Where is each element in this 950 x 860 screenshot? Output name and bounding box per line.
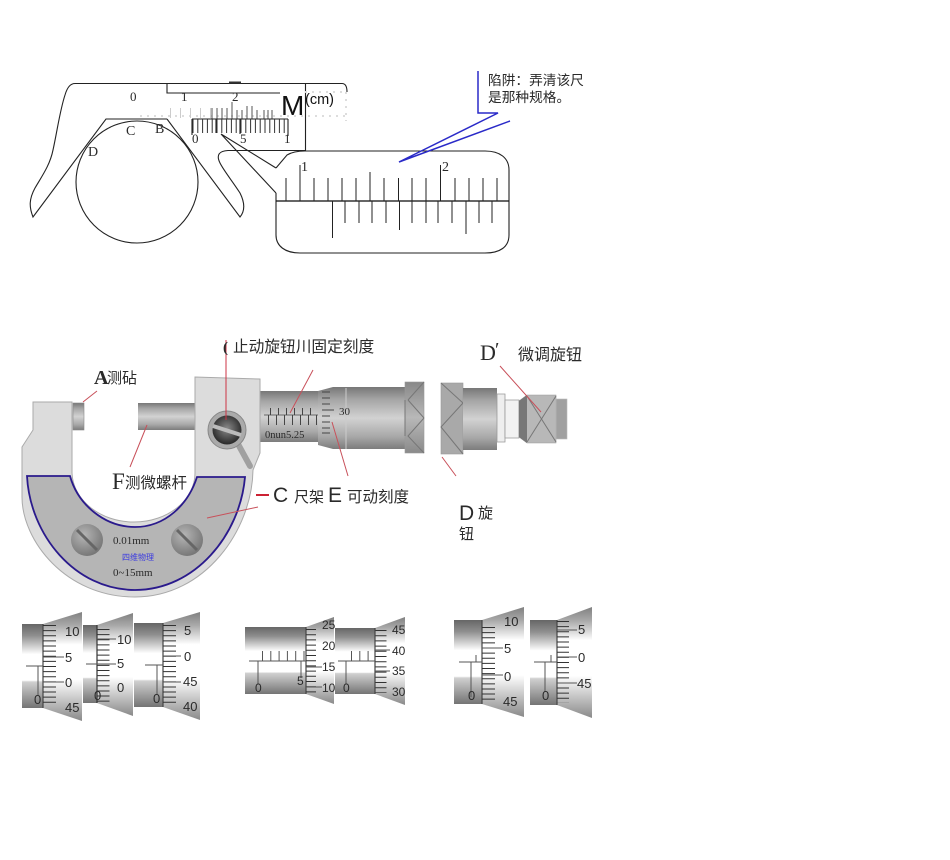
micrometer part labels	[94, 338, 582, 543]
reading 2: 0	[117, 680, 124, 695]
anvil	[73, 403, 84, 430]
label: fine adjustment D′	[480, 339, 582, 365]
reading 3: 0	[153, 691, 160, 706]
ratchet knob right half	[441, 383, 519, 454]
label: knob D: 钮	[459, 526, 474, 543]
reading 5: 35	[392, 664, 406, 678]
frame	[22, 377, 260, 597]
reading 6: 10	[504, 614, 518, 629]
sleeve scale: 0nun5.25	[265, 430, 304, 441]
reading example 1 group	[22, 612, 200, 721]
reading 5: 30	[392, 685, 406, 699]
reading 3	[134, 612, 200, 720]
reading 6	[454, 607, 524, 717]
reading 4: 0	[255, 681, 262, 695]
screw left	[71, 524, 103, 556]
measured circle	[76, 121, 198, 243]
reading 2: 5	[117, 656, 124, 671]
caliper digits and contact labels: C	[126, 124, 135, 139]
label: spindle F	[112, 469, 187, 494]
reading 1: 10	[65, 624, 79, 639]
label: anvil A: A	[94, 367, 109, 389]
reading 1: 0	[34, 692, 41, 707]
reading 7	[530, 607, 592, 718]
label: frame C and movable scale E: 可动刻度	[347, 488, 409, 506]
spindle	[138, 403, 196, 430]
reading 5: 45	[392, 623, 406, 637]
magnified scale panel	[276, 151, 509, 253]
label: fine adjustment D′: D	[480, 340, 496, 365]
label: frame C and movable scale E: 尺架	[294, 489, 324, 506]
label: anvil A	[94, 367, 137, 389]
label: frame C and movable scale E: C	[273, 484, 288, 507]
reading 1: 45	[65, 700, 79, 715]
label: knob D	[459, 502, 493, 543]
reading 5	[335, 617, 406, 705]
reading 7: 5	[578, 622, 585, 637]
callout text: 陷阱：弄清该尺	[488, 73, 584, 88]
reading 3: 40	[183, 699, 197, 714]
reading example 3 group	[454, 607, 592, 718]
red leader lines	[83, 340, 541, 518]
reading 1: 0	[65, 675, 72, 690]
lock handle	[238, 444, 250, 466]
thimble scale	[322, 388, 350, 449]
label: knob D: D	[459, 502, 474, 525]
fine adjustment knob	[519, 395, 567, 443]
reading 2: 0	[94, 688, 101, 703]
caliper digits and contact labels: D	[88, 145, 98, 160]
reading 6: 45	[503, 694, 517, 709]
reading 3: 0	[184, 649, 191, 664]
reading example 2 group	[245, 617, 406, 705]
ratchet knob left half	[405, 382, 424, 453]
caliper digits and contact labels: 1	[181, 89, 188, 104]
reading 4	[245, 617, 336, 704]
reading 6: 0	[504, 669, 511, 684]
trap callout with blue leader	[399, 71, 584, 162]
nameplate text	[113, 535, 154, 579]
caliper diagram	[30, 82, 509, 253]
nameplate text: 四维物理	[122, 552, 154, 562]
reading 3: 5	[184, 623, 191, 638]
caliper digits and contact labels: 1	[284, 131, 290, 146]
micrometer diagram	[22, 377, 567, 597]
caliper digits and contact labels: 0	[130, 89, 136, 104]
blue leader line	[399, 71, 510, 162]
nameplate text: 0~15mm	[113, 567, 153, 579]
reading 1: 5	[65, 650, 72, 665]
caliper body outline	[30, 84, 347, 217]
thimble	[318, 387, 405, 449]
label: frame C and movable scale E	[273, 484, 409, 507]
sleeve	[259, 391, 321, 442]
screw right	[171, 524, 203, 556]
reading 2	[83, 613, 133, 716]
magnified scale panel: 1	[301, 160, 308, 175]
reading 4: 5	[297, 674, 304, 688]
reading 5: 40	[392, 644, 406, 658]
reading 7: 45	[577, 676, 591, 691]
label: locking knob and fixed scale: (	[223, 340, 228, 356]
reading 6: 0	[468, 688, 475, 703]
reading 4: 25	[322, 618, 336, 632]
sleeve scale	[264, 410, 320, 441]
vernier scale marks	[140, 82, 347, 136]
caliper digits and contact labels: 0	[192, 131, 198, 146]
label: knob D: 旋	[478, 505, 493, 522]
blue nameplate	[27, 476, 245, 590]
unit label M (cm): (cm)	[305, 92, 334, 108]
label: frame C and movable scale E: E	[328, 484, 342, 507]
lock knob	[208, 411, 246, 449]
reading 4: 20	[322, 639, 336, 653]
reading 3: 45	[183, 674, 197, 689]
label: anvil A: 测砧	[107, 370, 137, 387]
caliper digits and contact labels: B	[155, 122, 164, 137]
reading 5: 0	[343, 681, 350, 695]
reading 1	[22, 612, 82, 721]
reading 7: 0	[542, 688, 549, 703]
reading 6: 5	[504, 641, 511, 656]
caliper digits and contact labels	[88, 89, 290, 160]
magnified scale panel: 2	[442, 160, 449, 175]
thimble scale: 30	[339, 406, 350, 418]
label: locking knob and fixed scale: 止动旋钮川固定刻度	[233, 338, 374, 356]
label: fine adjustment D′: 微调旋钮	[518, 346, 582, 364]
nameplate text: 0.01mm	[113, 535, 150, 547]
caliper digits and contact labels: 5	[240, 131, 246, 146]
unit label M (cm): M	[281, 90, 304, 121]
reading 4: 10	[322, 681, 336, 695]
callout text	[488, 73, 584, 105]
reading 4: 15	[322, 660, 336, 674]
unit label M (cm)	[281, 90, 334, 121]
label: fine adjustment D′: ′	[495, 339, 499, 361]
callout text: 是那种规格。	[488, 90, 570, 105]
pointer lines to magnified view	[221, 134, 276, 193]
caliper digits and contact labels: 2	[232, 89, 238, 104]
label: spindle F: 测微螺杆	[125, 474, 187, 492]
reading 2: 10	[117, 632, 131, 647]
label: spindle F: F	[112, 469, 125, 494]
reading 7: 0	[578, 650, 585, 665]
